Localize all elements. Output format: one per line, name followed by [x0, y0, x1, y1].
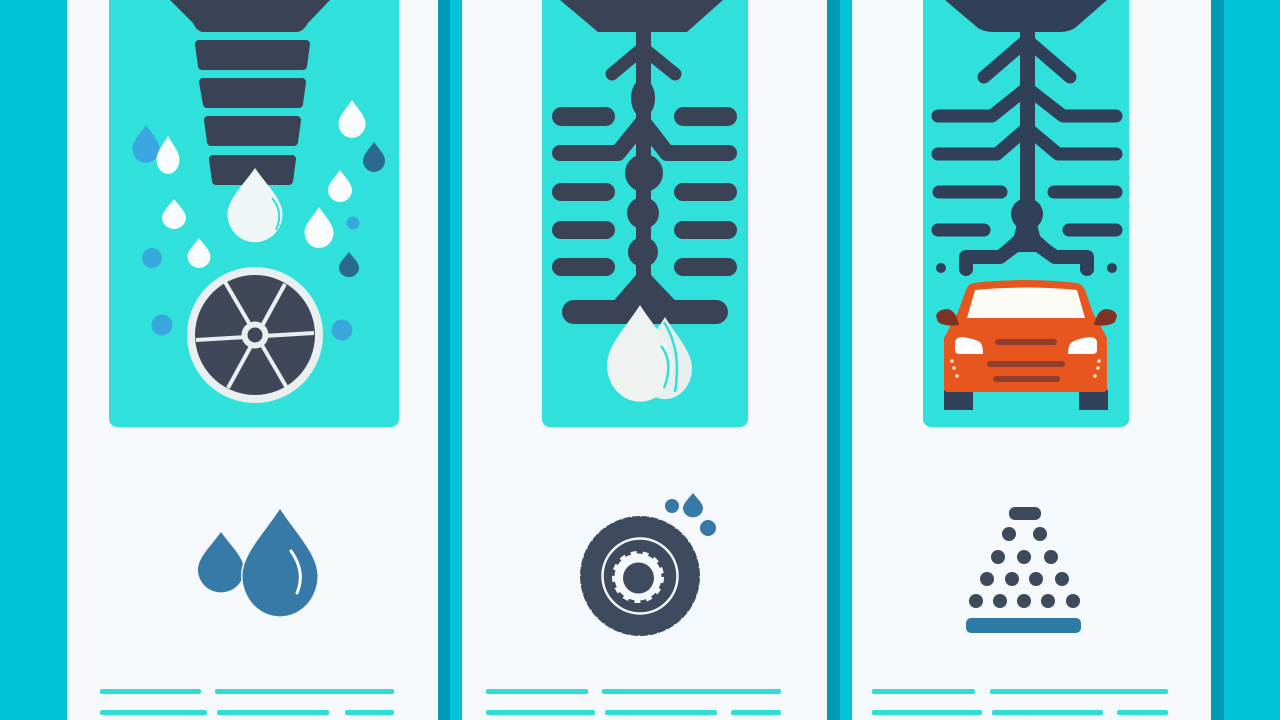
white drops	[156, 100, 366, 268]
dark blue drops	[339, 142, 385, 277]
text lines	[872, 689, 1168, 715]
text lines	[100, 689, 394, 715]
spray pipe	[936, 0, 1117, 273]
text lines	[486, 689, 781, 715]
light blue drop	[132, 125, 160, 163]
large central drop	[228, 168, 282, 242]
panel: car column	[852, 0, 1211, 720]
funnel rings	[199, 44, 306, 181]
wheel	[191, 271, 319, 399]
icon: tire with drops	[580, 493, 716, 636]
teal card with pipe and car	[923, 0, 1129, 427]
teal card with branching pipe	[542, 0, 748, 427]
blue blobs	[142, 216, 360, 340]
icon: water drops	[198, 508, 318, 616]
double drop	[607, 305, 692, 402]
branching pipe	[552, 0, 737, 324]
icon: spray of dots	[966, 507, 1081, 633]
teal card with funnel and wheel	[109, 0, 399, 427]
funnel head	[170, 0, 330, 32]
panel: water spray column	[67, 0, 438, 720]
orange car	[936, 280, 1117, 410]
panel: tire column	[462, 0, 827, 720]
